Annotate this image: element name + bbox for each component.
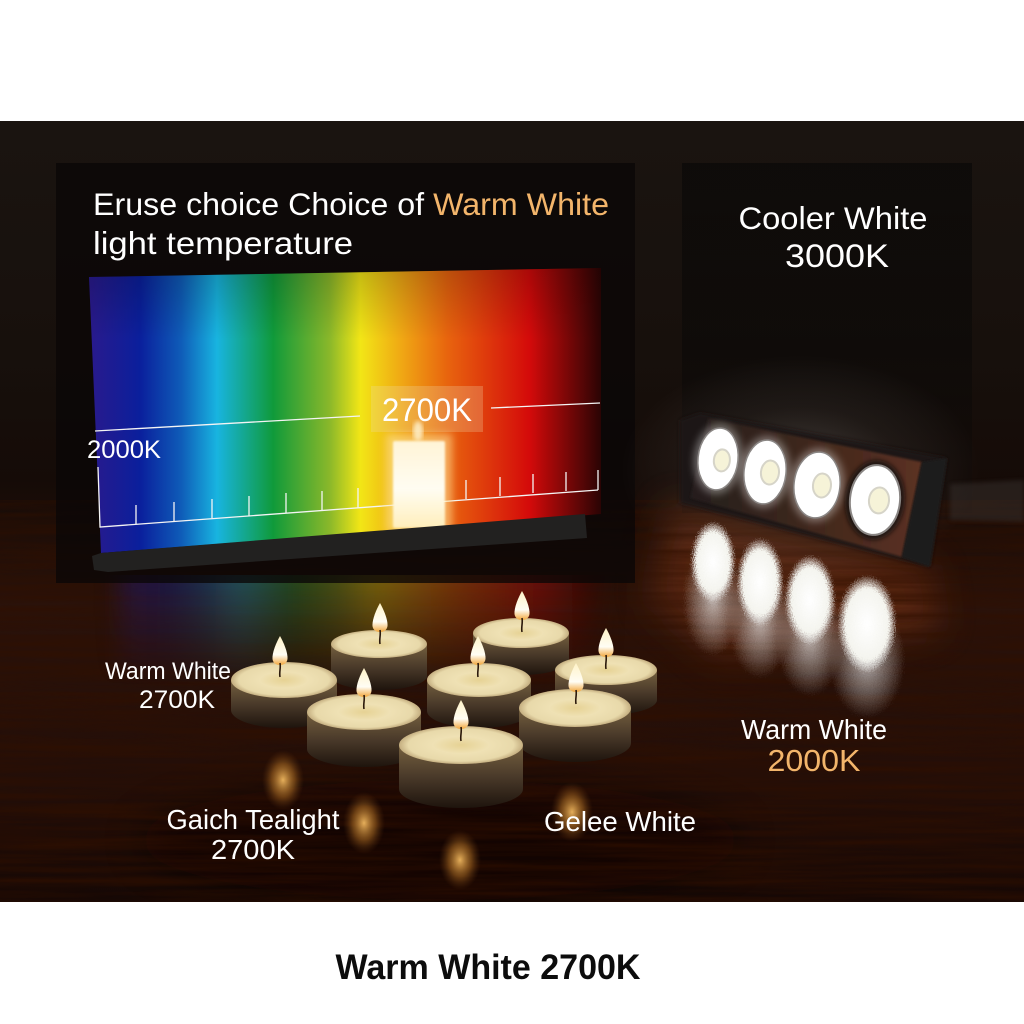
- panel: cooler white backing: [682, 163, 972, 513]
- tealight reflections: [262, 750, 593, 890]
- scale lines: [95, 403, 600, 527]
- tealight front right: [519, 663, 631, 762]
- tealight back right: [473, 591, 569, 675]
- panel: spectrum backing: [56, 163, 635, 583]
- scale label 2000K: 2000K: [87, 436, 161, 464]
- spectrum reflection on table: [110, 575, 594, 672]
- tealight back left: [331, 603, 427, 690]
- tealight far right: [555, 628, 657, 715]
- title: caption below image: Warm White 2700K: [336, 948, 640, 987]
- tealight front: [399, 700, 523, 808]
- spectrum stand base: [92, 514, 587, 572]
- label: warm white 2000K right: Warm White: [741, 714, 887, 745]
- tealight group: [231, 591, 657, 808]
- label: gelee white: Gelee White: [544, 806, 696, 837]
- label: warm white 2000K right: [741, 714, 887, 778]
- tealight front left: [307, 668, 421, 767]
- label: warm white 2000K right: 2000K: [768, 743, 861, 778]
- background photo area: [0, 121, 1024, 902]
- tealight left: [231, 636, 337, 728]
- icon: pillar candle: [386, 421, 452, 532]
- LED light bar: [620, 355, 1024, 585]
- scale label 2700K: [371, 386, 483, 432]
- LED lamps: [690, 422, 909, 543]
- LED reflections on table: [683, 522, 905, 718]
- label: warm white 2700K left: [105, 658, 231, 714]
- label: warm white 2700K left: Warm White: [105, 658, 231, 685]
- label: tealight 2700K: 2700K: [211, 834, 295, 865]
- label: cooler white: 3000K: [785, 238, 889, 274]
- heading: spectrum panel: [93, 186, 609, 261]
- heading: spectrum panel: Eruse choice Choice of Warm White: [93, 186, 609, 222]
- heading: spectrum panel: light temperature: [93, 225, 353, 261]
- label: tealight 2700K: [166, 804, 340, 865]
- spectrum chart: [87, 268, 601, 553]
- label: cooler white: Cooler White: [738, 200, 928, 236]
- tealight centre: [427, 636, 531, 728]
- label: cooler white: [738, 200, 928, 274]
- scale label 2700K: 2700K: [382, 392, 472, 428]
- label: tealight 2700K: Gaich Tealight: [166, 804, 340, 835]
- label: warm white 2700K left: 2700K: [139, 686, 215, 714]
